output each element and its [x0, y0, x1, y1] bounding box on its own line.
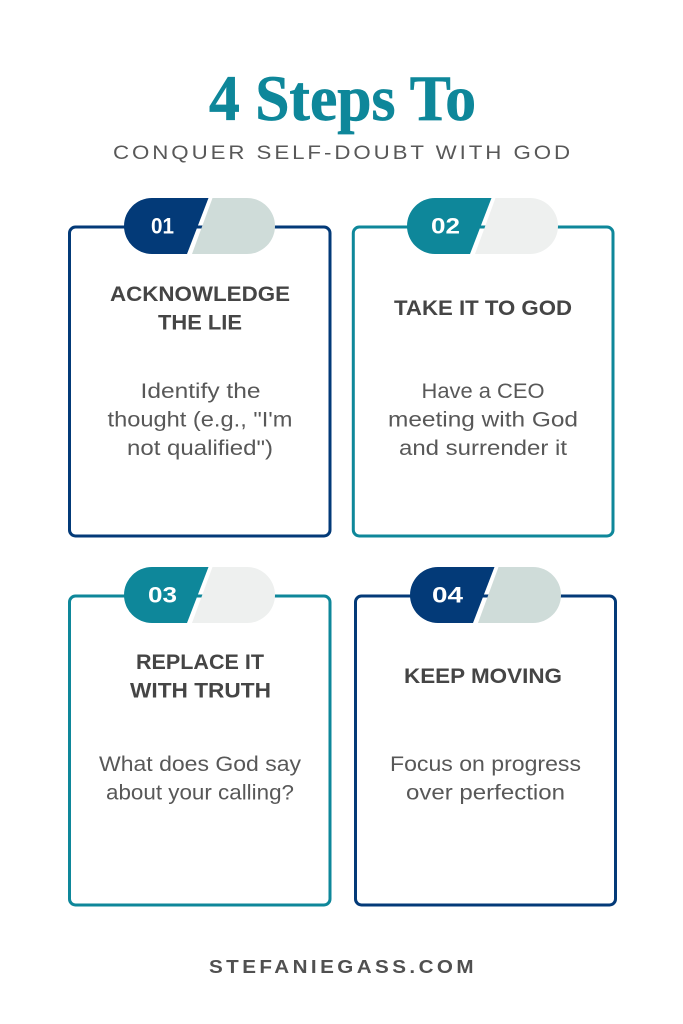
heading: KEEP MOVING — [404, 665, 562, 688]
panel border — [356, 596, 616, 905]
number badge 04: 04 — [432, 582, 464, 608]
panel: step 1 — [70, 198, 330, 536]
panel border — [353, 227, 613, 536]
panel border — [70, 227, 330, 536]
heading — [110, 283, 290, 334]
body text: not qualified") — [127, 437, 273, 460]
subtitle: CONQUER SELF-DOUBT WITH GOD — [113, 143, 573, 164]
number badge 01: 01 — [151, 214, 174, 238]
panel border — [70, 596, 330, 905]
body text — [108, 380, 292, 460]
title: 4 Steps To — [209, 63, 476, 135]
heading: REPLACE IT — [136, 651, 264, 674]
body text — [388, 380, 578, 460]
body text: What does God say — [99, 753, 302, 776]
body text: meeting with God — [388, 408, 578, 432]
number badge 02: 02 — [431, 214, 460, 238]
heading: THE LIE — [158, 312, 242, 334]
body text — [99, 753, 302, 804]
number badge 01 — [124, 198, 275, 254]
panel: step 3 — [70, 567, 330, 905]
body text: Identify the — [140, 380, 260, 403]
body text — [390, 753, 581, 804]
heading — [130, 651, 271, 702]
number badge 03 — [124, 567, 275, 623]
heading: ACKNOWLEDGE — [110, 283, 290, 306]
body text: Have a CEO — [422, 380, 544, 403]
panel: step 4 — [356, 567, 616, 905]
heading: WITH TRUTH — [130, 680, 271, 702]
heading: TAKE IT TO GOD — [394, 297, 572, 320]
panel: step 2 — [353, 198, 613, 536]
body text: and surrender it — [399, 437, 567, 460]
footer website: STEFANIEGASS.COM — [209, 957, 477, 977]
body text: about your calling? — [106, 782, 294, 804]
number badge 04 — [410, 567, 561, 623]
body text: Focus on progress — [390, 753, 581, 776]
number badge 03: 03 — [148, 582, 177, 608]
body text: over perfection — [406, 782, 565, 804]
number badge 02 — [407, 198, 558, 254]
body text: thought (e.g., "I'm — [108, 408, 292, 432]
